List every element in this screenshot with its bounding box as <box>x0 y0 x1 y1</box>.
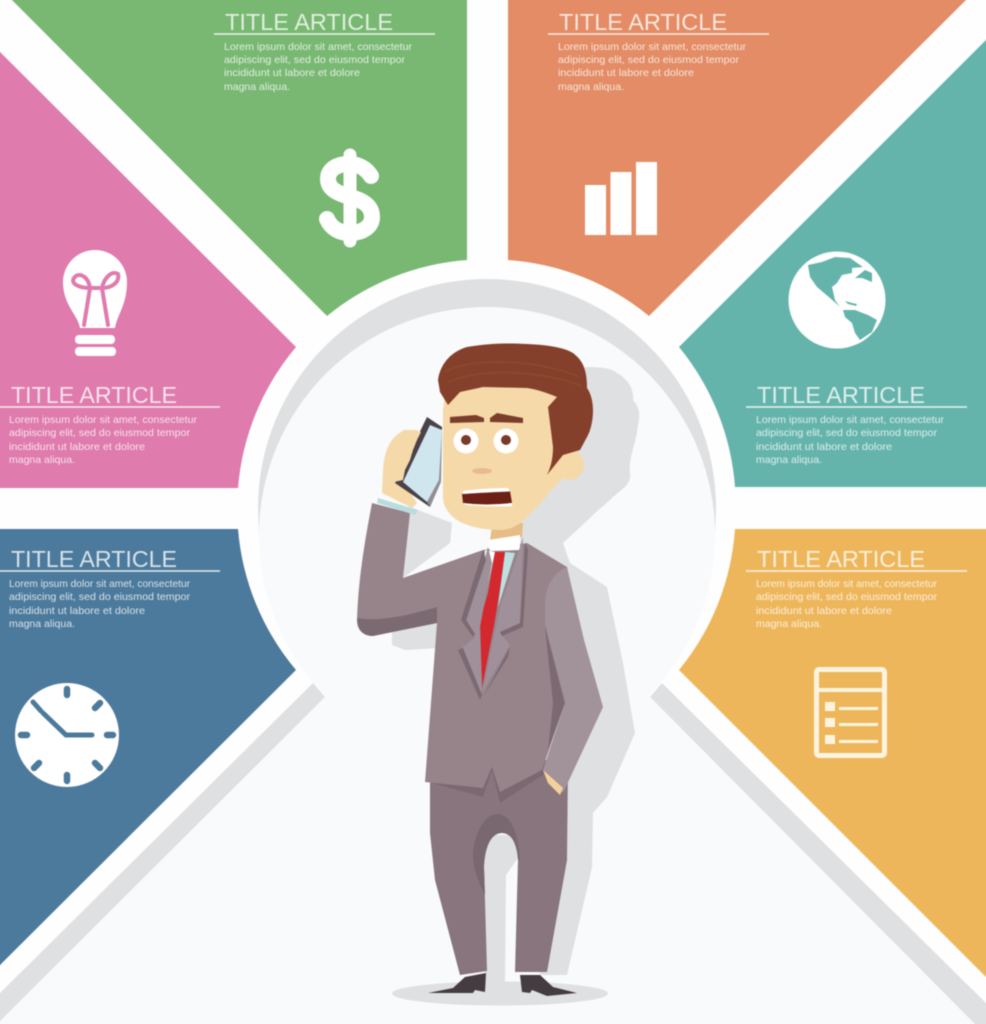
cast shadow <box>392 367 639 985</box>
jacket lapels <box>458 537 528 700</box>
text block: green panel: adipiscing elit, sed do eiusmod tempor <box>224 55 406 66</box>
text block: blue panel <box>9 579 191 630</box>
left grey stripe <box>0 683 325 1024</box>
shoe: left <box>428 973 486 993</box>
text block: yellow panel: magna aliqua. <box>756 619 822 630</box>
text block: pink panel: adipiscing elit, sed do eiusmod tempor <box>9 428 191 439</box>
panel: yellow checklist <box>679 529 986 983</box>
text block: teal panel: Lorem ipsum dolor sit amet, consectetur <box>756 415 945 426</box>
shirt cuff <box>377 498 418 515</box>
text block: blue panel: adipiscing elit, sed do eiusmod tempor <box>9 592 191 603</box>
shoe: right <box>520 975 577 996</box>
panel: teal global <box>679 34 986 487</box>
jacket hem shadow <box>432 760 548 803</box>
arm underside <box>357 607 437 636</box>
panel: pink ideas <box>0 46 296 488</box>
panel: green finance <box>6 0 467 316</box>
panel: orange statistics <box>508 0 972 316</box>
text block: teal panel: adipiscing elit, sed do eiusmod tempor <box>756 428 938 439</box>
text block: yellow panel: incididunt ut labore et dolore <box>756 606 892 617</box>
text block: orange panel: incididunt ut labore et dolore <box>558 68 694 79</box>
icon: light bulb <box>63 250 127 356</box>
icon: dollar sign <box>327 155 372 241</box>
text block: yellow panel: Lorem ipsum dolor sit amet, consectetur <box>756 579 938 590</box>
icon: bar chart <box>585 162 657 235</box>
text block: pink panel: magna aliqua. <box>9 455 75 466</box>
text block: pink panel <box>9 415 198 466</box>
text block: pink panel: incididunt ut labore et dolore <box>9 442 145 453</box>
text block: blue panel: Lorem ipsum dolor sit amet, consectetur <box>9 579 191 590</box>
text block: orange panel: magna aliqua. <box>558 82 624 93</box>
text block: yellow panel: adipiscing elit, sed do eiusmod tempor <box>756 592 938 603</box>
text block: green panel: incididunt ut labore et dolore <box>224 68 360 79</box>
text block: blue panel: incididunt ut labore et dolore <box>9 606 145 617</box>
shirt collar and front <box>483 535 520 607</box>
mouth <box>462 488 512 506</box>
text block: blue panel: magna aliqua. <box>9 619 75 630</box>
trousers <box>430 760 568 975</box>
text block: orange panel: adipiscing elit, sed do eiusmod tempor <box>558 55 740 66</box>
ear <box>556 450 584 480</box>
text block: green panel <box>224 42 413 93</box>
heading: green panel: TITLE ARTICLE <box>225 9 393 35</box>
fingers gripping phone <box>388 430 421 482</box>
pocket hand <box>543 770 563 795</box>
nose <box>472 468 492 474</box>
heading: teal panel: TITLE ARTICLE <box>757 382 925 408</box>
hair <box>438 343 593 475</box>
red tie <box>480 552 505 688</box>
heading: pink panel: TITLE ARTICLE <box>11 382 177 408</box>
heading: yellow panel: TITLE ARTICLE <box>757 546 925 572</box>
heading: blue panel: TITLE ARTICLE <box>11 546 177 572</box>
panel: blue time <box>0 529 296 971</box>
trouser inner shading <box>473 814 520 895</box>
floor shadow <box>392 982 608 1006</box>
right grey stripe <box>650 683 986 1024</box>
icon: checklist <box>814 667 887 758</box>
neck <box>490 523 523 540</box>
text block: teal panel <box>756 415 945 466</box>
heading: orange panel: TITLE ARTICLE <box>559 9 727 35</box>
illustration: businessman on the phone <box>357 343 639 1006</box>
eyes <box>454 428 518 454</box>
text block: green panel: Lorem ipsum dolor sit amet, consectetur <box>224 42 413 53</box>
face <box>443 375 566 530</box>
jacket and raised arm <box>357 503 580 792</box>
panel: central light backdrop <box>0 307 981 1024</box>
jacket sleeve shadow <box>545 627 565 750</box>
text block: orange panel <box>558 42 747 93</box>
icon: clock <box>15 683 119 787</box>
text block: green panel: magna aliqua. <box>224 82 290 93</box>
text block: pink panel: Lorem ipsum dolor sit amet, consectetur <box>9 415 198 426</box>
eyebrows <box>450 413 523 423</box>
right sleeve <box>543 567 603 793</box>
icon: globe <box>788 252 886 348</box>
text block: orange panel: Lorem ipsum dolor sit amet, consectetur <box>558 42 747 53</box>
decorative crescent ring <box>258 279 716 535</box>
text block: yellow panel <box>756 579 938 630</box>
hand <box>382 430 418 508</box>
text block: teal panel: incididunt ut labore et dolore <box>756 442 892 453</box>
text block: teal panel: magna aliqua. <box>756 455 822 466</box>
smartphone <box>395 417 442 507</box>
